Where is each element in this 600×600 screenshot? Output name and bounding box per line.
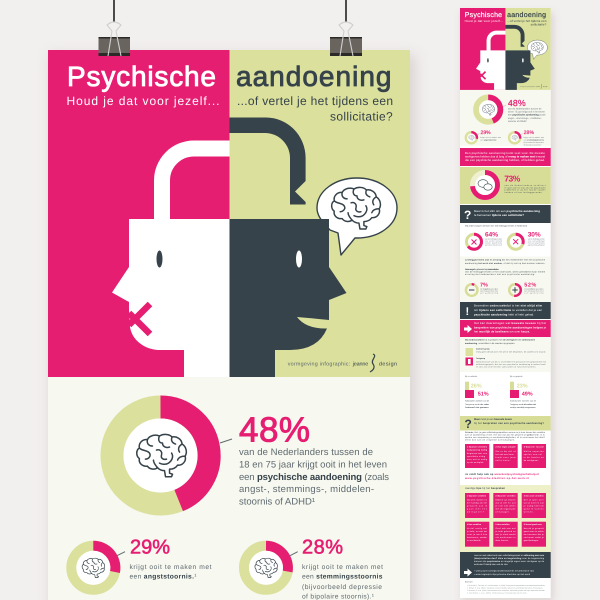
strip: white intro text: sprake van aanpassing in werkomstandigheden, of is vertrouwen het doel? — [465, 436, 546, 439]
tip cards: je nodig hebt om — [523, 504, 544, 508]
strip: cream stats 7% and 52%: ziet negatieve gevolgen — [480, 288, 498, 290]
text 28%: (bijvoorbeeld depressie — [302, 584, 382, 591]
strip: dark closing band: (Hoe)vertellen dan? Kies en begeleiding over de begeleiding — [474, 557, 545, 560]
strip: cream options block: aandoening , verschillen in de reacties op groepen. — [465, 342, 515, 345]
tip cards: voor je werk kan — [467, 533, 487, 536]
subtitle left: Houd je dat voor jezelf... — [66, 94, 220, 108]
strip: three pink cards: spelen een rol — [524, 453, 542, 456]
strip: pale green tips section: Handige tips bij het bespreken — [465, 487, 505, 490]
tip cards: wat je sterk maakt — [496, 533, 516, 536]
strip: dark question band: ? — [464, 208, 471, 222]
strip: cream stats 7% and 52%: Leidinggevenden zijn er al bang dat een medewerker met een psychische — [465, 259, 546, 262]
tip cards: 3 Een ook vertellen — [524, 494, 545, 498]
strip: three pink cards: in de functie en — [524, 456, 544, 459]
strip: pink intro band: die een psychische aandoening hebben, of hebben gehad. — [465, 158, 545, 162]
tip cards: Bereid je gesprek — [524, 527, 544, 530]
strip: cream stats 7% and 52%: een aandoening — [524, 292, 543, 294]
strip: stats 64% and 30%: Wij ondervroegen mensen met 100 leidinggevenden in Nederland — [465, 224, 527, 228]
tip cards: 4 Hoe vertellen — [467, 523, 482, 526]
tip cards: goed beslagen. — [524, 539, 539, 542]
tip cards: of manager. — [496, 510, 510, 514]
strip: dark closing band: • www.hoghelpt.nl/psychische-klachten-op-het-werk — [474, 573, 531, 576]
strip: green question panel — [460, 416, 551, 431]
paragraph 48%: 18 en 75 jaar krijgt ooit in het leven — [239, 460, 387, 471]
tip cards: gesprek aan te — [467, 504, 487, 508]
binder clip left — [98, 0, 130, 56]
strip: green 73% panel: hebben of hun leidinggevende. — [504, 191, 543, 194]
strip: green 73% panel: er open over te zijn als een psychische — [504, 186, 546, 189]
strip: pink links — [465, 473, 539, 480]
title: Psychische: Psychische — [67, 61, 216, 92]
stat 28%: 28% — [302, 536, 343, 558]
text 28%: krijgt ooit te maken met — [302, 564, 383, 571]
paragraph 48% — [239, 447, 389, 507]
large donut 48% — [112, 407, 209, 504]
strip: stats 64% and 30%: aandoening afwijzen — [528, 244, 545, 246]
poster cream body — [48, 377, 410, 600]
strip: cream stats 7% and 52%: Van de leidinggevenden of het onderzoek, werkt gemiddeld maar enkele — [465, 271, 546, 274]
tip cards: met de organisatie — [496, 508, 516, 510]
tip cards: te veel details. — [467, 539, 481, 542]
strip: stats 64% and 30%: 30% — [528, 232, 541, 239]
strip: dark closing band: werkvloer? Bekijk dan ook de site: — [474, 563, 508, 566]
strip: stats 64% and 30%: van de leidinggevenden — [485, 238, 502, 240]
strip: dark warning band — [460, 302, 551, 319]
strip: stats 64% and 30%: zou een kandidaat — [528, 240, 545, 242]
strip: white bar comparison: 51% — [478, 392, 489, 398]
strip: pink intro band: Een psychische aandoening komt veel voor. De meeste — [465, 151, 545, 155]
strip: white bar comparison: Testgroep wordt als zeker niet — [510, 403, 536, 406]
strip: white bar comparison: 26% — [471, 383, 482, 389]
credit line: jeanne — [352, 362, 368, 368]
strip base — [460, 8, 551, 598]
strip: dark question band — [460, 205, 551, 223]
strip: white intro text — [465, 431, 546, 441]
subtitle right second line: sollicitatie? — [330, 110, 393, 124]
strip: stats 64% and 30%: 64% — [485, 232, 498, 239]
strip: green 73% panel: 73% — [504, 174, 521, 184]
tip cards: Op welk moment is — [467, 498, 487, 502]
tip cards: Bedenk van tevoren — [496, 498, 516, 502]
strip: three pink cards: het ook een kans — [496, 453, 514, 456]
strip: stats 64% and 30%: aandoening kiezen — [485, 244, 502, 246]
strip: white intro text: over je aandoening of niet. Het kan zijn dat het gesprek tot gedoe leidt. Is er — [465, 433, 545, 436]
strip: three pink cards: specifieke uitleg — [467, 455, 485, 458]
strip: references: 4. Van Boekel, L. et al. (2016). Onderzoek naar het bespreken op het werk. — [467, 592, 528, 594]
subtitle right: ...of vertel je het tijdens een — [237, 94, 393, 108]
strip: white intro text: Criteria: Stel: je gaat sollicitatiegesprekken voeren en je kunt kiezen het vertellen — [465, 431, 545, 434]
strip: pink intro band — [460, 148, 551, 166]
white head eye — [156, 250, 162, 268]
tip cards: 2 Wanneer vertellen — [496, 494, 516, 498]
strip: cream stats 7% and 52%: van medewerkers met — [524, 290, 544, 292]
poster shadow — [50, 54, 416, 600]
strip: three pink cards: 2 Hoe eigen situatie — [496, 446, 516, 448]
strip: pink advice band: Het kan daarentegen wel bewuste keuzes bij het — [474, 322, 546, 325]
small donut 28% — [244, 546, 288, 590]
strip: dark warning band: psychische aandoening hebt of hebt gehad. — [474, 313, 534, 316]
paragraph 48%: stoornis of ADHD¹ — [239, 496, 315, 507]
strip: dark closing band — [460, 552, 551, 578]
title: aandoening: aandoening — [236, 61, 392, 92]
stat 48%: 48% — [239, 411, 310, 450]
tip cards: wat je kunt en wat — [524, 502, 544, 504]
strip: three pink cards: de werkgever. — [524, 459, 539, 462]
tip cards: je niet wilt delen — [494, 504, 516, 508]
strip: pink intro band: werkgevers hebben dus al lang of vroeg te maken met iemand — [465, 155, 545, 159]
strip: three pink cards: Welke aspecten — [524, 450, 544, 453]
strip: three pink cards: Aanpassing nodig — [467, 448, 488, 452]
tip cards: met mensen die je — [524, 533, 544, 536]
long infographic strip — [460, 8, 551, 598]
panel: pink left half — [48, 50, 230, 377]
tip cards: vertrouwt zodat je — [524, 536, 544, 539]
credit line: design — [379, 362, 397, 368]
strip: stats 64% and 30%: zonder psychische — [485, 242, 502, 244]
strip: stats 64% and 30%: met een psychische — [528, 242, 545, 244]
text 28%: een stemmingsstoornis — [302, 574, 383, 581]
speech bubble with brain — [317, 178, 397, 255]
strip: dark question band: te benoemen tijdens een sollicitatie? — [474, 213, 524, 217]
strip: cream options block: Deed de keuze van de cv, of vertelde een speciaal in een gesprek met een — [476, 360, 546, 363]
strip: three pink cards: Sta er bij stil of — [496, 450, 516, 453]
text 29%: krijgt ooit te maken met — [130, 564, 212, 571]
panel: green right half — [230, 50, 410, 377]
strip: white bar comparison: Bij cv-gesprek — [510, 375, 523, 378]
pointer line 28% — [290, 552, 298, 556]
strip: white bar comparison: 23% — [517, 383, 528, 389]
strip: three pink cards: 1 Wanneer vertellen — [467, 446, 488, 448]
strip: green question panel: Maar moet je een bewuste keuze — [474, 418, 513, 421]
strip: stats 64% and 30%: van de leidinggevenden — [528, 238, 545, 240]
strip: stats 64% and 30%: zou eerder iemand — [485, 240, 502, 242]
dark open shackle — [230, 118, 306, 204]
strip: pink links: Je vindt hulp ook op www.bestpsychologischehulp.nl — [465, 473, 539, 476]
tip cards: goed voor en oefen — [524, 530, 544, 533]
strip: cream options block: te zien als vertel eerder sollicitaties of functieverschillen. — [476, 366, 536, 368]
strip: green 73% panel: van de Nederlanders verklaart — [504, 184, 546, 187]
tip cards: werken. — [524, 510, 534, 514]
strip: three pink cards: Beginnen met een — [467, 452, 487, 455]
dark head in profile — [230, 219, 346, 377]
strip: dark warning band: Bovendien onderzoekslui is het niet altijd slim — [474, 305, 543, 308]
strip: white bar comparison — [465, 375, 536, 409]
strip: references: 1. De Graaf, R., Ten Have, M., Van Dorsselaer, S. (2010). De psychische gezondheid van de Nederlandse bevolking. — [467, 584, 546, 587]
tip cards: Vertel rustig wat — [467, 527, 487, 530]
tip cards: je hebt, en wat het — [466, 530, 487, 533]
strip: green question panel: bij het bespreken van een psychische aandoening? — [474, 422, 544, 425]
strip: cream stats 7% and 52%: ziet positieve gevolgen — [524, 288, 543, 290]
strip: white bar comparison: Bij cv-selectie — [465, 375, 478, 378]
tip cards: als werknemer in — [496, 536, 516, 539]
strip: cream stats 7% and 52%: 7% — [480, 283, 488, 289]
strip: white bar comparison: Sollicitanten noemen van de — [510, 400, 536, 403]
tip cards: gaan met een — [467, 508, 487, 510]
strip: three pink cards — [465, 444, 546, 468]
text 29% — [130, 564, 212, 581]
tip cards: betekenen, zonder — [467, 536, 487, 539]
strip: cream stats 7% and 52%: ervaring met medewerkers met een psychische aandoening. — [465, 273, 535, 276]
strip: three pink cards: 3 Wanneer functie — [524, 446, 544, 448]
tip cards: goed te kunnen — [524, 508, 544, 510]
strip: pink advice band — [460, 320, 551, 337]
binder clip right — [330, 0, 362, 56]
strip: white bar comparison: 49% — [522, 392, 533, 398]
small donut 29% — [71, 546, 115, 590]
strip: dark warning band: om tijdens een sollicitatie te vertellen dat je een — [474, 309, 542, 312]
tip cards: wat je wel en wat — [496, 502, 516, 504]
strip: dark closing band: mensen die psychische en mogelijk eigen weer sterkgaan op de — [474, 560, 545, 563]
text 29%: een angststoornis.¹ — [130, 574, 197, 581]
strip: stats 64% and 30% — [465, 224, 545, 249]
text 28% — [302, 564, 383, 600]
strip: cream stats 7% and 52%: aandoening het werk niet aankan , of dat zij niet op hem kunnen rekenen. — [465, 262, 545, 265]
pointer line 29% — [117, 552, 125, 556]
strip: cream stats 7% and 52%: van medewerkers met — [480, 290, 499, 292]
strip: pink advice band: het moeilijk de beslissen om over keuze. — [474, 330, 530, 333]
strip: cream stats 7% and 52%: een aandoening — [480, 292, 498, 294]
strip top: copy of poster — [460, 8, 551, 146]
strip: references: Bronnen — [465, 580, 473, 583]
tip cards: werkgever? — [467, 510, 484, 514]
tip cards: deze functie. — [496, 539, 509, 542]
strip: references: 2. Brohan, E. et al. (2012). Systematic review of beliefs, behaviours and influencing factors for disclosure. — [467, 586, 544, 590]
strip: three pink cards: biedt voor jouw — [496, 456, 516, 459]
strip: pink links: www.psychische-klachten-op-het-werk.nl — [465, 477, 529, 480]
strip: white bar comparison: wordt je uiteindelijk aangenomen. — [510, 406, 536, 409]
crossed mouth — [129, 304, 150, 334]
credit line: vormgeving infographic: — [288, 362, 350, 368]
tip cards: 5 Hoe vertellen — [496, 523, 510, 526]
strip: green 73% panel: problemen er op een functie zouden — [504, 189, 546, 192]
strip: white bar comparison: Testgroep wordt als zeker — [465, 403, 489, 406]
strip: three pink cards: sollicitatie. — [496, 459, 511, 462]
white head in profile — [112, 219, 230, 377]
strip: white bar comparison: 'betrouwd' niet genomen. — [465, 406, 489, 409]
strip: dark closing band: Lees en wat onderzoek naar sollicitatiegesprek en officering over een — [474, 554, 545, 557]
tip cards: het handig om het — [467, 502, 487, 504]
strip: cream options block: Controle groep — [476, 347, 490, 350]
strip: references: 3. Brouwers, E. et al. (2016). Discrimination in the workplace, reported by people with major depressive disorder. — [467, 589, 546, 592]
dark head eye — [296, 250, 302, 268]
paragraph 48%: een psychische aandoening (zoals — [239, 472, 389, 483]
strip: cream stats 7% and 52%: 52% — [524, 283, 536, 289]
strip: white intro text: Denk dan aan de volgende overwegingen. — [465, 438, 515, 441]
tip cards: je hebt geleerd en — [494, 530, 516, 533]
strip: three pink cards: op de werkplek. — [467, 461, 484, 464]
strip: pink advice band: bespreken van psychische aandoeningen helpen je — [474, 326, 546, 329]
tip cards: 1 Wanneer vertellen — [467, 494, 487, 498]
strip: cream options block — [460, 337, 551, 372]
main poster — [48, 50, 410, 600]
tip cards: Geef ook aan wat — [496, 527, 516, 530]
strip: pale green tips section — [460, 485, 551, 552]
strip: cream options block: Wij onderzochten bij 2 groepen met de werkgever en sollicitanten — [465, 339, 536, 342]
strip: dark closing band: • www.psychischegezondheidswerkt.nl/sollicitatie-tips — [474, 570, 534, 573]
white shackle — [162, 148, 230, 222]
pointer line — [220, 439, 232, 443]
strip: dark warning band: ! — [466, 306, 469, 318]
strip: references — [465, 580, 546, 594]
strip shadow — [461, 12, 554, 600]
tip cards: 6 Vooraf goed voor — [524, 523, 542, 526]
strip: dark question band: Maar is het slim om een psychische aandoening — [474, 209, 540, 213]
credit line — [288, 354, 397, 372]
strip: cream options block: sollicitatiegesprek, dat met een psychische aandoening te maken heeft. — [476, 363, 546, 366]
strip: white bar comparison: Sollicitanten noemen van de — [465, 400, 489, 403]
tip cards: Ben je open over — [524, 498, 544, 502]
strip: green question panel: ? — [464, 417, 472, 431]
paragraph 48%: van de Nederlanders tussen de — [239, 447, 373, 458]
strip: cream stats 7% and 52% — [460, 256, 551, 302]
strip: cream options block: Vroeg geen details over een wel of niet bespreken, be oordeel zo'n situatie. — [476, 351, 546, 354]
stat 29%: 29% — [130, 536, 170, 558]
strip: cream stats 7% and 52%: Deze angst is gebaseerd op vooroordelen . — [465, 268, 499, 271]
strip: cream options block: Testgroep — [476, 357, 486, 360]
tip cards — [465, 493, 546, 547]
strip: three pink cards: over wat er nodig — [467, 458, 487, 461]
strip: green 73% panel — [460, 167, 551, 204]
paragraph 48%: angst-, stemmings-, middelen- — [239, 484, 374, 495]
